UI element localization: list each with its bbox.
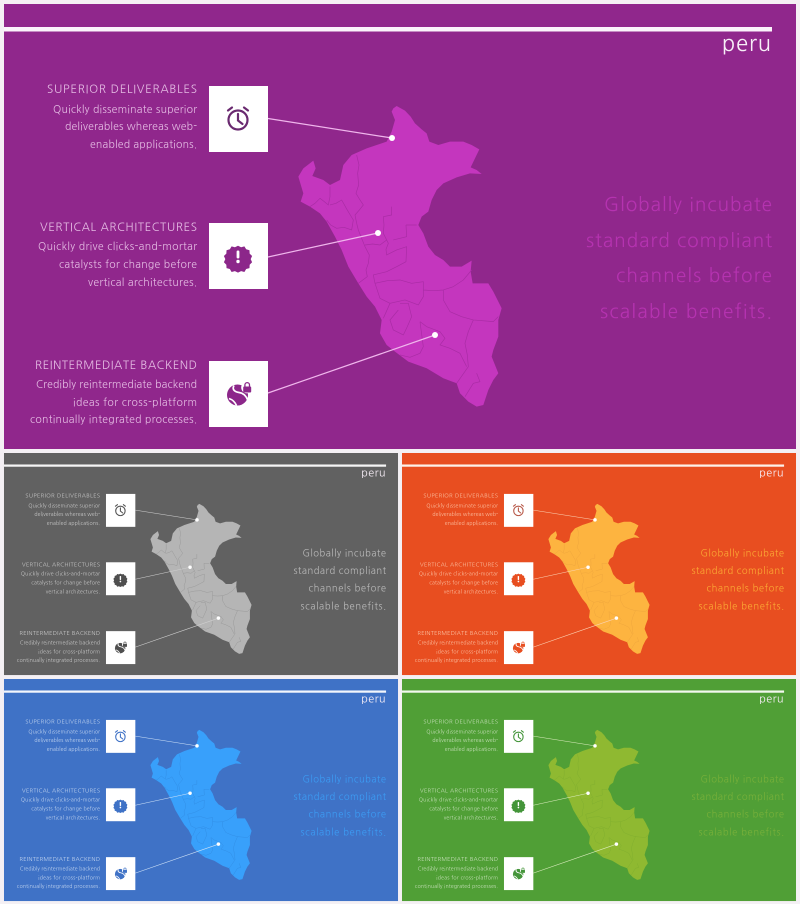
map of Peru: [298, 106, 502, 407]
tagline: standard compliant: [692, 567, 785, 576]
callout: vertical architectures: vertical architectures.: [46, 590, 100, 595]
tagline: channels before: [706, 585, 784, 594]
callout: superior deliverables: SUPERIOR DELIVERABLES: [25, 492, 100, 498]
callout: superior deliverables: deliverables whereas web-: [34, 738, 100, 743]
callout: vertical architectures: vertical architectures.: [46, 816, 100, 821]
callout: vertical architectures: vertical architectures.: [444, 590, 498, 595]
callout: reintermediate backend: ideas for cross-platform: [436, 650, 498, 655]
panel: orange variant: [402, 453, 796, 675]
callout: vertical architectures: [21, 787, 192, 821]
callout: superior deliverables: enabled applications.: [445, 747, 498, 752]
tagline: channels before: [308, 811, 386, 820]
callout: reintermediate backend: [415, 616, 618, 664]
callout: vertical architectures: VERTICAL ARCHITECTURES: [420, 787, 498, 793]
panel: blue variant: [4, 679, 398, 901]
tagline: channels before: [616, 266, 772, 285]
callout: reintermediate backend: continually integrated processes.: [17, 658, 100, 663]
callout: superior deliverables: SUPERIOR DELIVERABLES: [423, 492, 498, 498]
callout: reintermediate backend: REINTERMEDIATE BACKEND: [417, 856, 498, 862]
callout: vertical architectures: catalysts for change before: [31, 581, 100, 586]
tagline: [586, 195, 772, 321]
panel: gray variant: [4, 453, 398, 675]
tagline: scalable benefits.: [699, 829, 784, 838]
callout: vertical architectures: catalysts for change before: [59, 259, 197, 270]
callout: superior deliverables: Quickly disseminate superior: [28, 503, 100, 508]
callout: superior deliverables: Quickly disseminate superior: [426, 503, 498, 508]
tagline: Globally incubate: [604, 195, 772, 214]
callout: vertical architectures: [419, 561, 590, 595]
callout: vertical architectures: catalysts for change before: [429, 581, 498, 586]
callout: vertical architectures: vertical architectures.: [444, 816, 498, 821]
callout: superior deliverables: enabled applications.: [47, 747, 100, 752]
callout: superior deliverables: deliverables whereas web-: [432, 738, 498, 743]
map of Peru: [548, 504, 650, 654]
callout: vertical architectures: [38, 221, 381, 289]
callout: superior deliverables: [423, 492, 597, 527]
callout: vertical architectures: VERTICAL ARCHITECTURES: [22, 561, 100, 567]
callout: reintermediate backend: [17, 616, 220, 664]
map of Peru: [548, 730, 650, 880]
header rule: [4, 690, 386, 693]
tagline: standard compliant: [586, 231, 772, 250]
tagline: scalable benefits.: [699, 603, 784, 612]
heading: peru: peru: [361, 693, 386, 704]
tagline: channels before: [308, 585, 386, 594]
header rule: [4, 27, 772, 32]
tagline: scalable benefits.: [301, 829, 386, 838]
callout: superior deliverables: Quickly disseminate superior: [426, 729, 498, 734]
callout: reintermediate backend: REINTERMEDIATE BACKEND: [35, 359, 197, 371]
callout: superior deliverables: deliverables whereas web-: [65, 121, 197, 132]
header rule: [402, 464, 784, 467]
callout: superior deliverables: deliverables whereas web-: [432, 512, 498, 517]
heading: peru: peru: [759, 693, 784, 704]
tagline: Globally incubate: [302, 549, 386, 558]
callout: vertical architectures: VERTICAL ARCHITECTURES: [22, 787, 100, 793]
tagline: standard compliant: [294, 567, 387, 576]
callout: reintermediate backend: Credibly reintermediate backend: [418, 641, 498, 646]
tagline: scalable benefits.: [301, 603, 386, 612]
callout: reintermediate backend: ideas for cross-platform: [38, 650, 100, 655]
callout: reintermediate backend: ideas for cross-platform: [436, 876, 498, 881]
tagline: [294, 549, 387, 612]
tagline: standard compliant: [294, 793, 387, 802]
callout: vertical architectures: Quickly drive clicks-and-mortar: [419, 572, 498, 577]
tagline: [692, 549, 785, 612]
map of Peru: [150, 504, 252, 654]
callout: superior deliverables: enabled applications.: [445, 521, 498, 526]
callout: vertical architectures: catalysts for change before: [31, 807, 100, 812]
callout: vertical architectures: vertical architectures.: [88, 277, 197, 288]
callout: vertical architectures: Quickly drive clicks-and-mortar: [419, 798, 498, 803]
callout: reintermediate backend: [30, 332, 438, 427]
tagline: scalable benefits.: [600, 302, 772, 321]
tagline: Globally incubate: [700, 549, 784, 558]
callout: superior deliverables: Quickly disseminate superior: [28, 729, 100, 734]
tagline: standard compliant: [692, 793, 785, 802]
callout: reintermediate backend: continually integrated processes.: [415, 658, 498, 663]
callout: superior deliverables: [25, 492, 199, 527]
callout: superior deliverables: SUPERIOR DELIVERABLES: [423, 718, 498, 724]
callout: superior deliverables: [47, 83, 395, 152]
callout: reintermediate backend: Credibly reintermediate backend: [20, 867, 100, 872]
callout: reintermediate backend: continually integrated processes.: [415, 884, 498, 889]
callout: superior deliverables: SUPERIOR DELIVERABLES: [25, 718, 100, 724]
heading: peru: peru: [722, 33, 771, 55]
callout: superior deliverables: [25, 718, 199, 753]
callout: reintermediate backend: [17, 842, 220, 890]
callout: vertical architectures: [419, 787, 590, 821]
header rule: [402, 690, 784, 693]
callout: reintermediate backend: [415, 842, 618, 890]
callout: vertical architectures: Quickly drive clicks-and-mortar: [21, 798, 100, 803]
callout: reintermediate backend: REINTERMEDIATE BACKEND: [19, 856, 100, 862]
callout: reintermediate backend: continually integrated processes.: [17, 884, 100, 889]
callout: superior deliverables: Quickly disseminate superior: [53, 104, 197, 115]
callout: reintermediate backend: Credibly reintermediate backend: [418, 867, 498, 872]
heading: peru: peru: [759, 467, 784, 478]
panel: purple main: [4, 4, 796, 449]
callout: reintermediate backend: continually integrated processes.: [30, 414, 197, 425]
tagline: channels before: [706, 811, 784, 820]
callout: reintermediate backend: REINTERMEDIATE BACKEND: [19, 630, 100, 636]
callout: superior deliverables: deliverables whereas web-: [34, 512, 100, 517]
callout: vertical architectures: VERTICAL ARCHITECTURES: [420, 561, 498, 567]
callout: reintermediate backend: ideas for cross-platform: [73, 397, 197, 408]
callout: vertical architectures: [21, 561, 192, 595]
callout: vertical architectures: catalysts for change before: [429, 807, 498, 812]
callout: superior deliverables: SUPERIOR DELIVERABLES: [47, 83, 197, 95]
map of Peru: [150, 730, 252, 880]
callout: vertical architectures: VERTICAL ARCHITECTURES: [40, 221, 197, 233]
tagline: [294, 775, 387, 838]
callout: vertical architectures: Quickly drive clicks-and-mortar: [38, 241, 197, 252]
tagline: Globally incubate: [700, 775, 784, 784]
tagline: Globally incubate: [302, 775, 386, 784]
callout: superior deliverables: enabled applications.: [47, 521, 100, 526]
callout: reintermediate backend: ideas for cross-platform: [38, 876, 100, 881]
header rule: [4, 464, 386, 467]
callout: superior deliverables: enabled applications.: [90, 139, 197, 150]
callout: reintermediate backend: REINTERMEDIATE BACKEND: [417, 630, 498, 636]
callout: superior deliverables: [423, 718, 597, 753]
heading: peru: peru: [361, 467, 386, 478]
callout: reintermediate backend: Credibly reintermediate backend: [36, 379, 197, 390]
callout: vertical architectures: Quickly drive clicks-and-mortar: [21, 572, 100, 577]
callout: reintermediate backend: Credibly reintermediate backend: [20, 641, 100, 646]
tagline: [692, 775, 785, 838]
panel: green variant: [402, 679, 796, 901]
